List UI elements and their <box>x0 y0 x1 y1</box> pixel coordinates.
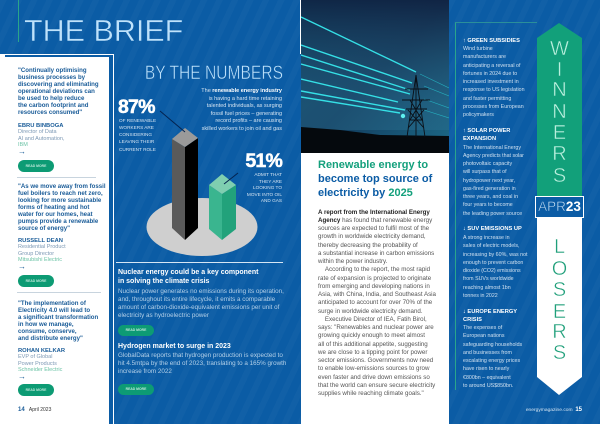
losers text: suv: increasing by 60%, was not <box>463 252 527 258</box>
word: LOSERS: L <box>554 236 565 258</box>
button: read more 2: READ MORE <box>26 279 46 283</box>
losers text: suv: tonnes in 2022 <box>463 293 498 299</box>
chart base ellipse <box>146 198 258 256</box>
quote 2: fuel boilers to reach net zero, <box>18 190 103 196</box>
footer: website and page number: energymagazine.com 15 <box>526 407 582 413</box>
article heading: Renewable energy to <box>318 159 428 171</box>
banner shape green <box>537 23 582 196</box>
losers heading: europe: ↓ EUROPE ENERGY <box>463 309 517 315</box>
winners text: solar: photovoltaic capacity <box>463 161 512 167</box>
word: LOSERS: S <box>553 279 566 301</box>
stat label 87%: CONSIDERING <box>119 132 152 137</box>
arrow 1: → <box>18 147 26 156</box>
ground silhouette <box>301 127 449 153</box>
losers text: suv: dioxide (CO2) emissions <box>463 268 521 274</box>
winners text: solar: will surpass that of <box>463 169 507 175</box>
attribution 1 <box>18 123 64 148</box>
winners text: green subsidies: policymakers <box>463 112 494 118</box>
button: read more 1: READ MORE <box>26 164 46 168</box>
quote 2: source of energy" <box>18 224 70 232</box>
word: LOSERS: S <box>553 342 566 364</box>
losers text: europe: The expenses of <box>463 325 502 331</box>
arrow 2: → <box>18 262 26 271</box>
quote 2: water for our homes, heat <box>18 210 92 218</box>
winners text: green subsidies: increased investment in <box>463 79 519 85</box>
panel: thin blue strip beside quotes <box>5 55 113 57</box>
article body: sector emissions. Governments now need <box>318 357 433 364</box>
losers text: suv: reaching almost 1bn <box>463 285 511 291</box>
stat: 51%: 51% <box>245 150 282 172</box>
button: read more 1 <box>18 160 54 172</box>
quote 1: be used to help reduce <box>18 95 84 102</box>
divider 2 <box>17 292 101 293</box>
heading: nuclear <box>118 268 258 285</box>
quote 3: "The implementation of <box>18 300 86 306</box>
article body: from emerging and developing nations in <box>318 283 430 290</box>
quote 1: the carbon footprint and <box>18 102 88 109</box>
panel: centre blue page area <box>114 54 301 424</box>
quotes panel outline right <box>113 54 114 423</box>
losers text: europe: safeguarding households <box>463 342 522 348</box>
quote 1: business processes by <box>18 74 85 81</box>
article body: we are close to a tipping point for power <box>318 349 427 356</box>
description text: skilled workers to join oil and gas <box>202 126 282 132</box>
stat label 51%: LOOKING TO <box>253 185 282 190</box>
winners text: green subsidies <box>463 46 525 118</box>
winners text: green subsidies: and faster permitting <box>463 96 511 102</box>
article body: anticipated to account for over 70% of the <box>318 299 432 306</box>
winners heading: green subsidies: ↑ GREEN SUBSIDIES <box>463 38 520 44</box>
winners text: green subsidies: response to US legislation <box>463 87 525 93</box>
article body: to enable low-emissions sources to grow <box>318 365 429 372</box>
button: read more 3 <box>18 384 54 396</box>
word: LOSERS: O <box>552 258 567 280</box>
winners text: green subsidies: manufacturers are <box>463 54 506 60</box>
stat label 51%: MOVE INTO OIL <box>247 192 282 197</box>
word: WINNERS <box>550 38 569 187</box>
pointer 51% <box>224 173 238 184</box>
stat label 87%: CURRENT ROLE <box>119 147 156 152</box>
quote 2: looking for more sustainable <box>18 196 101 204</box>
description text: record profits – are causing <box>215 118 282 124</box>
winners heading: solar: EXPANSION <box>463 136 496 142</box>
attribution 2 <box>18 238 66 263</box>
date badge: APR23 <box>538 199 581 214</box>
article body: A report from the International Energy <box>318 209 430 216</box>
winners heading: solar <box>463 128 510 142</box>
article body: within the power industry. <box>318 258 387 265</box>
quote 3: a significant transformation <box>18 314 98 320</box>
panel: quotes <box>17 67 106 413</box>
quote 3: consume, conserve, <box>18 328 77 334</box>
description text: The renewable energy industry <box>201 88 282 94</box>
article body: all of this additional appetite, suggesting <box>318 341 428 348</box>
quote 3: Electricity 4.0 will lead to <box>18 306 90 314</box>
quote 3: in how we manage, <box>18 320 74 328</box>
attribution 2: Mitsubishi Electric <box>18 257 62 263</box>
bar: 51% <box>209 174 236 240</box>
heading: nuclear: in solving the climate crisis <box>118 278 209 285</box>
stat label 87%: WORKERS ARE <box>119 125 154 130</box>
article body: Agency has found that renewable energy <box>318 217 432 224</box>
quotes panel outline top <box>4 54 114 55</box>
panel: right blue page <box>449 0 600 424</box>
winners text: green subsidies: Wind turbine <box>463 46 493 52</box>
quote 1: discovering and eliminating <box>18 81 99 88</box>
article body <box>318 209 436 397</box>
losers text: suv: from SUVs worldwide <box>463 276 514 282</box>
article body: rate of expansion is projected to originate <box>318 275 431 282</box>
quote 3: and distribute energy" <box>18 334 83 342</box>
losers text: europe <box>463 325 522 389</box>
quote 2: pumps provide a renewable <box>18 218 98 224</box>
description text: is having a hard time retaining <box>209 96 282 102</box>
body: hydrogen <box>118 352 286 375</box>
winners text: solar: the leading power source <box>463 211 522 217</box>
losers text: suv <box>463 235 528 299</box>
quote 3 <box>18 300 98 342</box>
losers text: europe: European nations <box>463 333 505 339</box>
word: WINNERS: N <box>552 101 567 123</box>
winners text: solar: Agency predicts that solar <box>463 153 524 159</box>
body: nuclear: electricity as hydroelectric power <box>118 312 209 319</box>
losers text: europe: to around US$850bn. <box>463 383 513 389</box>
panel: vertical blue strip <box>109 55 113 424</box>
attribution 1: AI and Automation, <box>18 136 64 142</box>
quote 1 <box>18 67 99 116</box>
attribution 3: EVP of Global <box>18 354 52 360</box>
article body: growing quickly enough to meet almost <box>318 332 425 339</box>
attribution 3: ROHAN KELKAR <box>18 348 65 354</box>
article body: that the world can ensure secure electricity <box>318 382 435 389</box>
word: WINNERS: E <box>553 122 566 144</box>
bar: 87% <box>172 128 198 240</box>
stat label 51% <box>247 172 282 203</box>
word: WINNERS: W <box>550 38 569 60</box>
body: nuclear: and, throughout its entire lifecycle, it emits a comparable <box>118 296 275 303</box>
button: read more 2 <box>18 275 54 287</box>
winners text: green subsidies: fortunes in 2024 due to <box>463 71 517 77</box>
quote 1: "Continually optimising <box>18 67 87 74</box>
word: WINNERS: R <box>552 143 567 165</box>
article heading: electricity by 2025 <box>318 187 413 199</box>
pylon <box>402 75 430 137</box>
icon: glow on line <box>401 114 405 118</box>
description text: fossil fuel prices – generating <box>211 111 282 117</box>
losers heading: europe: CRISIS <box>463 317 482 323</box>
article body: growth in worldwide electricity demand, <box>318 233 426 240</box>
winners text: solar: three years, and coal in <box>463 194 518 200</box>
photo: power lines at dusk <box>301 0 449 153</box>
losers text: europe: escalating energy prices <box>463 358 520 364</box>
article heading: become top source of <box>318 173 432 185</box>
article body: sources are expected to fulfil most of the <box>318 225 429 232</box>
attribution 3: Schneider Electric <box>18 367 62 373</box>
pointer 87% <box>160 111 185 132</box>
article body: surge in worldwide electricity demand. <box>318 308 423 315</box>
article body: says: "Renewables and nuclear power are <box>318 324 434 331</box>
stat label 51%: THEY ARE <box>259 179 282 184</box>
article body: a substantial increase in carbon emissions <box>318 250 434 257</box>
body: hydrogen: increase from 2022 <box>118 368 172 375</box>
article heading <box>318 159 432 199</box>
winners text: green subsidies: processes from European <box>463 104 524 110</box>
divider <box>116 262 283 263</box>
quote 1: resources consumed" <box>18 109 82 116</box>
article body: According to the report, the most rapid <box>325 266 430 273</box>
divider 1 <box>17 177 96 178</box>
banner shape white <box>537 218 582 395</box>
attribution 1: Director of Data <box>18 129 57 135</box>
quote 1: operational deviations can <box>18 88 95 95</box>
winners text: green subsidies: anticipating a reversal of <box>463 63 520 69</box>
article body: Executive Director of IEA, Fatih Birol, <box>325 316 427 323</box>
word: LOSERS: R <box>552 321 567 343</box>
article body: even faster and drive down emissions so <box>318 374 430 381</box>
winners text: solar: gas-fired generation in <box>463 186 516 192</box>
attribution 2: Residential Product <box>18 244 66 250</box>
description text <box>201 88 282 132</box>
date badge <box>535 196 584 218</box>
word: WINNERS: N <box>552 79 567 101</box>
attribution 1: IBM <box>18 142 28 148</box>
article body: Asia, with China, India, and Southeast Asia <box>318 291 436 298</box>
word: LOSERS <box>552 236 567 364</box>
quote 2: forms of heating and hot <box>18 204 89 210</box>
attribution 3: Power Products <box>18 361 57 367</box>
losers text: europe: €800bn – equivalent <box>463 375 511 381</box>
word: LOSERS: E <box>553 301 566 323</box>
arrow 3: → <box>18 372 26 381</box>
stat: 87%: 87% <box>118 96 155 118</box>
heading: nuclear: Nuclear energy could be a key component <box>118 269 258 276</box>
winners heading: solar: ↑ SOLAR POWER <box>463 128 510 134</box>
accent line by title <box>18 0 19 42</box>
button: read more hydrogen <box>118 384 154 395</box>
heading: hydrogen: Hydrogen market to surge in 2023 <box>118 342 231 350</box>
stat label 87% <box>119 118 156 152</box>
stat label 51%: AND GAS <box>261 198 282 203</box>
losers heading: suv: ↓ SUV EMISSIONS UP <box>463 226 522 232</box>
losers text: suv: sales of electric models, <box>463 243 520 249</box>
page number left: 14 April 2023 <box>18 407 51 413</box>
losers text: europe: have risen to nearly <box>463 366 509 372</box>
stat label 51%: ADMIT THAT <box>254 172 282 177</box>
article body: supplies while reaching climate goals." <box>318 390 424 397</box>
article body: thereby decreasing the probability of <box>318 242 418 249</box>
quote 2: "As we move away from fossil <box>18 182 106 190</box>
body: hydrogen: GlobalData reports that hydrogen production is expected to <box>118 352 283 359</box>
button: read more 3: READ MORE <box>26 388 46 392</box>
button: read more hydrogen: READ MORE <box>126 387 146 391</box>
title: THE BRIEF <box>24 14 183 48</box>
chart: isometric bars <box>146 110 258 256</box>
button: read more nuclear: READ MORE <box>126 328 146 332</box>
quote 2 <box>18 182 106 232</box>
button: read more nuclear <box>118 324 154 336</box>
stat label 87%: LEAVING THEIR <box>119 139 154 144</box>
banner: losers <box>537 218 582 395</box>
winners text: solar: hydropower next year, <box>463 178 515 184</box>
banner: winners <box>537 23 582 196</box>
winners text: solar: The International Energy <box>463 145 521 151</box>
body: nuclear <box>118 288 284 319</box>
attribution 3 <box>18 348 65 373</box>
heading: by the numbers: BY THE NUMBERS <box>145 62 283 84</box>
body: hydrogen: hit 4.5mtpa by the end of 2023, translating to a 165% growth <box>118 360 286 367</box>
attribution 2: RUSSELL DEAN <box>18 238 63 244</box>
losers text: suv: enough to prevent carbon <box>463 260 523 266</box>
losers text: europe: and businesses from <box>463 350 512 356</box>
attribution 1: EBRU BINBOGA <box>18 123 63 129</box>
losers heading: europe <box>463 309 517 323</box>
word: WINNERS: I <box>557 59 562 81</box>
word: WINNERS: S <box>553 165 566 187</box>
stat label 87%: OF RENEWABLE <box>119 118 156 122</box>
teal frame line vertical <box>455 22 456 390</box>
body: nuclear: Nuclear power generates no emissions during its operation, <box>118 288 284 295</box>
description text: talented individuals, as surging <box>207 103 282 109</box>
winners text: solar <box>463 145 524 217</box>
teal frame line top <box>455 22 537 23</box>
attribution 2: Group Director <box>18 251 54 257</box>
winners text: solar: four years to become <box>463 202 513 208</box>
losers text: suv: A strong increase in <box>463 235 510 241</box>
panel: top blue band <box>0 0 300 54</box>
body: nuclear: amount of carbon-dioxide-equivalent emissions per unit of <box>118 304 279 311</box>
